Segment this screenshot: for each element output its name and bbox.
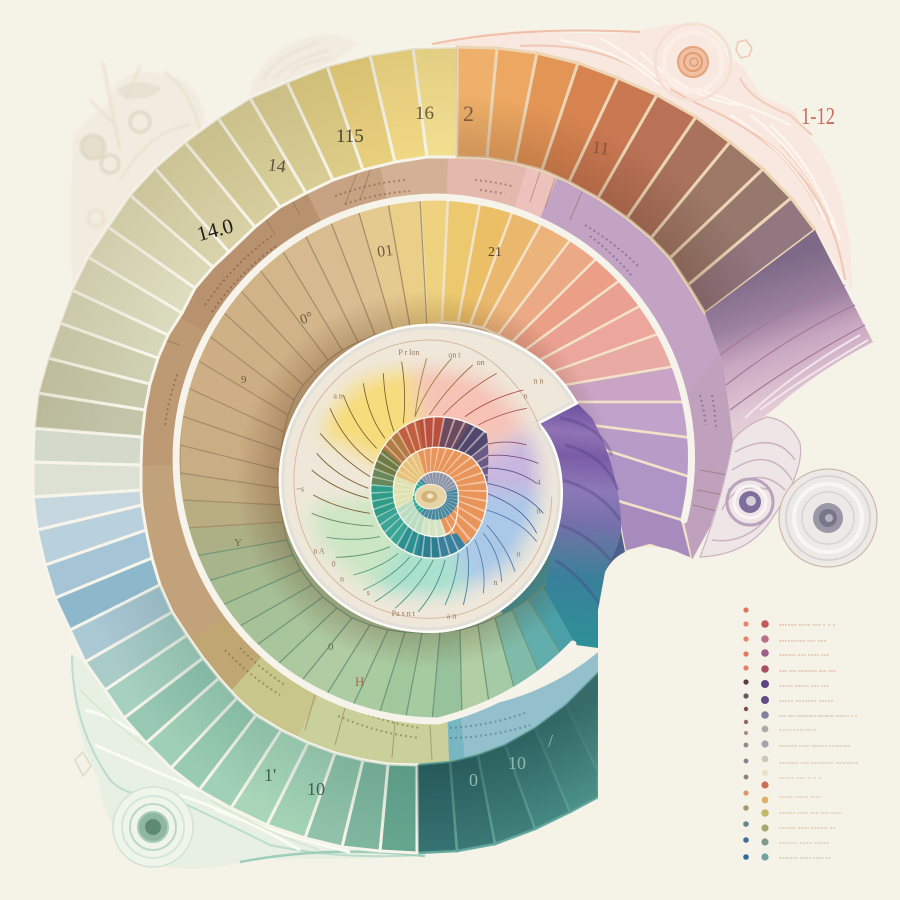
labels: middle band numerals: 0 xyxy=(328,641,334,653)
legend: small dots column xyxy=(743,607,749,860)
chart: middle radial ray band xyxy=(180,200,692,718)
disc watercolour wash xyxy=(281,326,575,630)
disc rim notes: s xyxy=(367,588,370,597)
white spiral divider xyxy=(176,197,691,721)
legend: tiny entry text: nnnnnnn nnn nnnnnnnn nnnnnnnn xyxy=(779,760,859,765)
ornament: top-left feather xyxy=(71,62,204,290)
ornament: top swirl xyxy=(250,35,358,98)
labels: middle band numerals: 9 xyxy=(241,374,247,386)
disc rim notes: ~s xyxy=(297,485,304,494)
labels: middle band numerals: 0° xyxy=(298,310,315,328)
legend: tiny entry text: nnnnnn nnnn nnnnnn nn xyxy=(779,825,836,830)
legend: tiny entry text: nnnnn nnnnnnn nnnnn xyxy=(779,698,834,703)
legend: tiny entry text: nnnnnn nnnn nnnnn xyxy=(779,840,830,845)
disc curved spokes xyxy=(312,358,543,612)
labels: middle band numerals: 21 xyxy=(488,245,502,260)
disc rim notes: on xyxy=(477,358,485,367)
legend: tiny entry text: nnnnn nnnnn nnnn xyxy=(779,794,822,799)
cream cut-out xyxy=(598,546,900,900)
labels: middle band numerals: Y xyxy=(234,537,242,549)
disc rim notes: on t xyxy=(448,350,461,359)
ornament: bottom-left mint swirl xyxy=(72,655,425,869)
disc rim notes: n n xyxy=(533,376,543,385)
legend: tiny entry text: nnnnnn nnn nnnn nnn xyxy=(779,652,830,657)
legend: tiny entry text: nnnnnnnnnnn xyxy=(779,727,817,732)
disc rim notes: 4 xyxy=(537,478,541,487)
disc rim notes: n xyxy=(340,575,344,584)
disc rim notes: n xyxy=(517,550,521,559)
rays: left tan xyxy=(180,198,427,556)
labels: outer band numerals: 115 xyxy=(336,126,364,147)
legend: tiny entry text: nnnnnn nnnn nnn nnn nnnn xyxy=(779,810,842,815)
legend: tiny entry text: nnn nnn nnnnnnnn nnnnnnn nnnn n n n xyxy=(779,713,858,718)
labels: middle band numerals: H xyxy=(355,674,364,689)
labels: middle band numerals: 01 xyxy=(376,242,394,261)
disc rim notes xyxy=(297,348,543,620)
disc rim notes: n A xyxy=(313,546,325,555)
band: parchment ring markings xyxy=(150,165,728,760)
shading overlays on outer band xyxy=(34,47,815,853)
disc rim notes: a n xyxy=(447,611,456,620)
labels: outer band numerals: 10 xyxy=(508,753,526,773)
labels: outer band numerals: 14 xyxy=(267,154,287,176)
labels: outer band numerals: 1' xyxy=(264,765,276,785)
band: purple to teal inner spiral arm xyxy=(538,403,621,648)
labels: middle band numerals xyxy=(234,242,502,689)
rays: upper right warm xyxy=(420,198,693,620)
legend: tiny entry text: nnnnnnn nnnn nnnn nn xyxy=(779,855,832,860)
inner spiral white outline xyxy=(371,417,487,558)
legend: tiny entry text: nnnnn nnn n n n xyxy=(779,775,822,780)
inner spiral ring one xyxy=(371,417,488,558)
legend: tiny entry text xyxy=(779,622,859,860)
legend: large dots column xyxy=(761,620,769,861)
disc rim notes: n xyxy=(493,578,497,587)
band: parchment ring right end xyxy=(676,350,733,560)
legend: tiny entry text: nnn nnn nnnnnnn nnn nnn xyxy=(779,668,837,673)
disc rim notes: 0 xyxy=(332,560,336,569)
segment: pale purple wood grain xyxy=(705,230,873,440)
segments: mint, blue, sage, yellow xyxy=(33,47,457,853)
segments: orange and brown xyxy=(457,47,815,313)
panel: inner disc xyxy=(278,324,578,633)
inner spiral ring two xyxy=(394,448,487,544)
labels: outer band numerals: 11 xyxy=(591,137,611,159)
legend: tiny entry text: nnnnn nnnnn nnn nnn xyxy=(779,683,830,688)
rays: lower green and teal xyxy=(195,540,600,722)
disc rim notes: Pa s n t xyxy=(392,609,416,618)
legend: tiny entry text: nnnnnn nnnn nnn n n n xyxy=(779,622,836,627)
labels: outer band numerals: 2 xyxy=(463,101,474,126)
labels: outer band numerals: 14.0 xyxy=(194,213,236,246)
disc rim notes: n xyxy=(523,391,527,400)
legend: tiny entry text: nnnnnnn nnnn nnnnnn nnnnnnnn xyxy=(779,743,851,748)
disc rim notes: a n xyxy=(333,391,343,400)
label: 1-12: 1-12 xyxy=(801,104,835,130)
labels: outer band numerals: 10 xyxy=(307,779,325,799)
legend: tiny entry text: nnnnnnnnn nnn nnn xyxy=(779,638,827,643)
ornament: purple swirl xyxy=(700,417,801,557)
disc rim notes: P r lon xyxy=(398,348,419,357)
labels: outer band numerals: 16 xyxy=(415,103,434,124)
ornament: grey concentric circle xyxy=(779,469,877,567)
legend xyxy=(743,607,859,861)
segments: dark teal xyxy=(417,673,598,853)
labels: outer band numerals xyxy=(194,101,611,799)
labels: outer band numerals: 0 xyxy=(469,770,478,790)
labels: outer band numerals: / xyxy=(548,731,553,751)
disc inner rim xyxy=(294,340,552,618)
ornament: top-right pink swirl xyxy=(432,24,852,290)
inner spiral core xyxy=(412,472,458,520)
disc rim notes: n xyxy=(537,506,541,515)
